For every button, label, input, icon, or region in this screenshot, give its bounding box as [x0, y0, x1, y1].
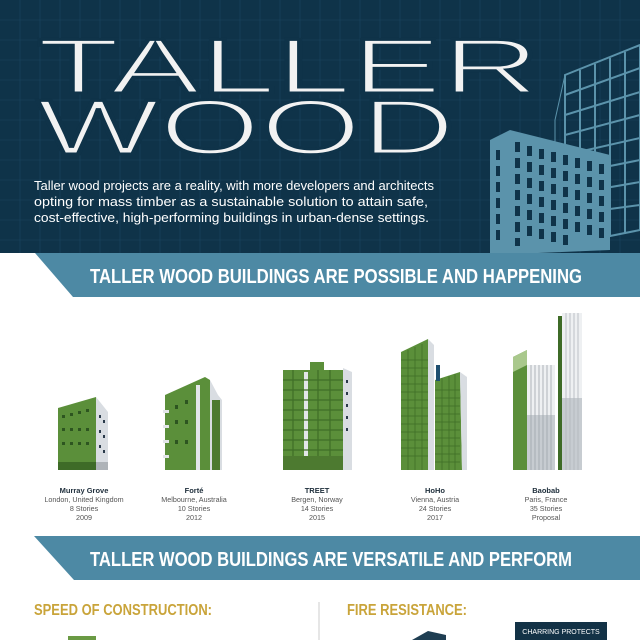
building: Murray Grove	[58, 397, 108, 470]
building labels: 24 Stories	[419, 504, 452, 513]
building labels: 2015	[309, 513, 325, 522]
building labels: Murray Grove	[60, 486, 108, 495]
building labels: Vienna, Austria	[411, 495, 459, 504]
callout: charring protects	[515, 622, 607, 640]
building labels: Baobab	[532, 486, 560, 495]
heading: speed of construction: SPEED OF CONSTRUCTION:	[34, 602, 212, 619]
callout: charring protects: CHARRING PROTECTS	[522, 629, 600, 636]
intro paragraph: Taller wood projects are a reality, with more developers and architects	[34, 179, 434, 193]
intro paragraph: cost-effective, high-performing buildings in urban-dense settings.	[34, 211, 429, 225]
title: WOOD	[37, 83, 455, 171]
building labels: 8 Stories	[70, 504, 99, 513]
intro paragraph	[34, 179, 434, 225]
title	[37, 22, 540, 171]
building labels: TREET	[305, 486, 330, 495]
building: HoHo	[401, 339, 467, 470]
building labels: 10 Stories	[178, 504, 211, 513]
icon: speed green block	[68, 636, 96, 640]
building: Baobab	[513, 313, 582, 470]
building labels	[44, 486, 567, 522]
building labels: Bergen, Norway	[291, 495, 343, 504]
building labels: Forté	[185, 486, 203, 495]
banner: versatile and perform	[34, 536, 640, 580]
header background	[0, 0, 640, 253]
building: Forte	[163, 377, 222, 470]
heading: fire resistance: FIRE RESISTANCE:	[347, 602, 467, 619]
title: TALLER	[37, 22, 540, 110]
building labels: London, United Kingdom	[44, 495, 124, 504]
icon: fire block	[412, 631, 446, 640]
header building illustration	[490, 45, 640, 255]
building labels: Proposal	[532, 513, 561, 522]
building labels: 35 Stories	[530, 504, 563, 513]
building labels: 2012	[186, 513, 202, 522]
building: TREET	[283, 362, 352, 470]
building labels: 2017	[427, 513, 443, 522]
building labels: Paris, France	[525, 495, 567, 504]
building labels: Melbourne, Australia	[161, 495, 227, 504]
banner: possible and happening	[35, 253, 640, 297]
building labels: 2009	[76, 513, 92, 522]
building labels: HoHo	[425, 486, 445, 495]
intro paragraph: opting for mass timber as a sustainable solution to attain safe,	[34, 195, 428, 209]
building labels: 14 Stories	[301, 504, 334, 513]
